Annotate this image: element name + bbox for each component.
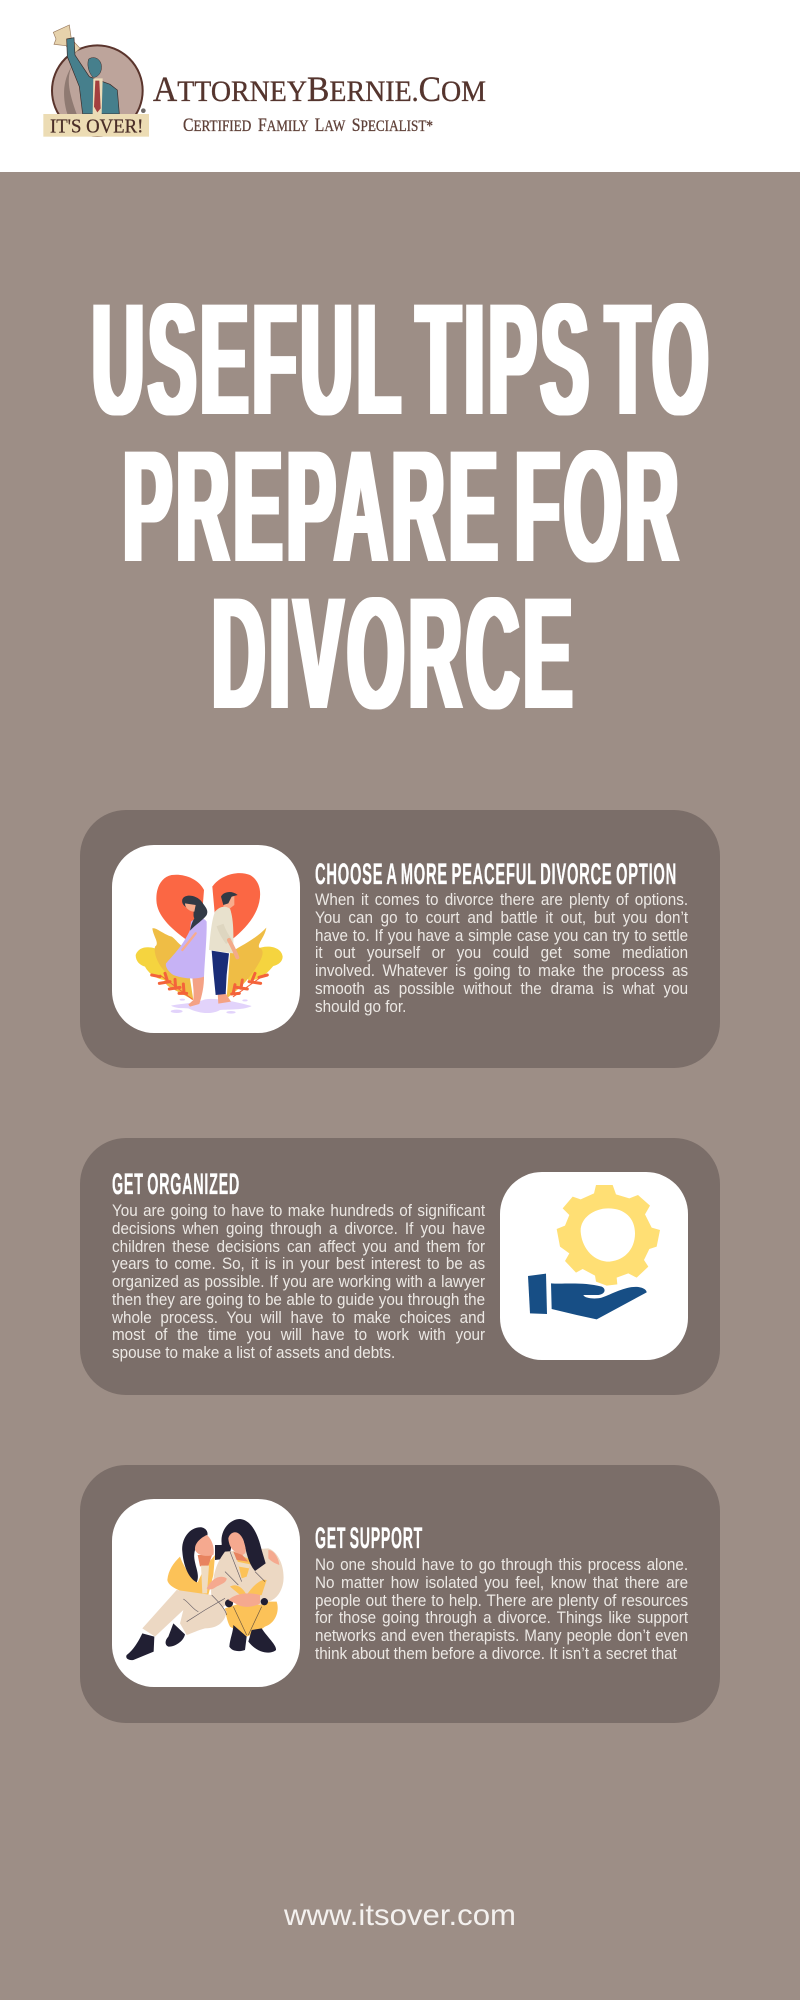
- body text: involved. Whatever is going to make the process as: [315, 962, 688, 980]
- body text: most of the time you will have to work with your: [112, 1326, 485, 1344]
- body text: should go for.: [315, 998, 406, 1016]
- panel: get support: GET SUPPORT: [315, 1522, 423, 1555]
- body text: You can go to court and battle it out, but you don’t: [315, 909, 688, 927]
- body text: smooth as possible without the drama is what you: [315, 980, 688, 998]
- body text: then they are going to be able to guide you through the: [112, 1291, 485, 1309]
- body text: networks and even therapists. Many people don’t even: [315, 1627, 688, 1645]
- panel: get support: [80, 1465, 720, 1723]
- body text: it out yourself or you could get some mediation: [315, 944, 688, 962]
- body text: have to. If you have a simple case you can try to settle: [315, 926, 688, 944]
- logo wordmark: ATTORNEYBERNIE.COM: [153, 69, 486, 109]
- body text: No one should have to go through this process alone.: [315, 1556, 688, 1574]
- body text: for those going through a divorce. Things like support: [315, 1609, 688, 1627]
- illustration: two friends sitting together: [112, 1499, 300, 1687]
- footer url: www.itsover.com: [283, 1899, 516, 1932]
- logo wordmark: CERTIFIED FAMILY LAW SPECIALIST*: [183, 116, 433, 136]
- body text: years to come. So, it is in your best interest to be as: [112, 1255, 485, 1273]
- logo emblem: man holding papers: [43, 24, 149, 137]
- body text: [315, 891, 688, 1016]
- logo wordmark: [153, 69, 486, 136]
- body text: spouse to make a list of assets and debts.: [112, 1344, 395, 1362]
- panel: get organized: GET ORGANIZED: [112, 1168, 240, 1201]
- body text: No matter how isolated you feel, know that there are: [315, 1574, 688, 1592]
- header band with logo: [0, 0, 800, 172]
- logo emblem: man holding papers: IT'S OVER!: [50, 115, 143, 137]
- panel: choose a more peaceful divorce option: [80, 810, 720, 1068]
- illustration: separated couple and broken heart: [112, 845, 300, 1033]
- panel: get organized: [80, 1138, 720, 1395]
- body text: organized as possible. If you are working with a lawyer: [112, 1273, 485, 1291]
- body text: [315, 1556, 688, 1663]
- body text: think about them before a divorce. It isn’t a secret that: [315, 1645, 677, 1663]
- body text: children these decisions can affect you and them for: [112, 1238, 485, 1256]
- title: [92, 270, 712, 742]
- body text: You are going to have to make hundreds of significant: [112, 1202, 485, 1220]
- body text: decisions when going through a divorce. If you have: [112, 1220, 485, 1238]
- body text: When it comes to divorce there are plenty of options.: [315, 891, 688, 909]
- icon: hand holding gear: [500, 1172, 688, 1360]
- body text: whole process. You will have to make choices and: [112, 1308, 485, 1326]
- body text: [112, 1202, 485, 1362]
- body text: people out there to help. There are plenty of resources: [315, 1592, 688, 1610]
